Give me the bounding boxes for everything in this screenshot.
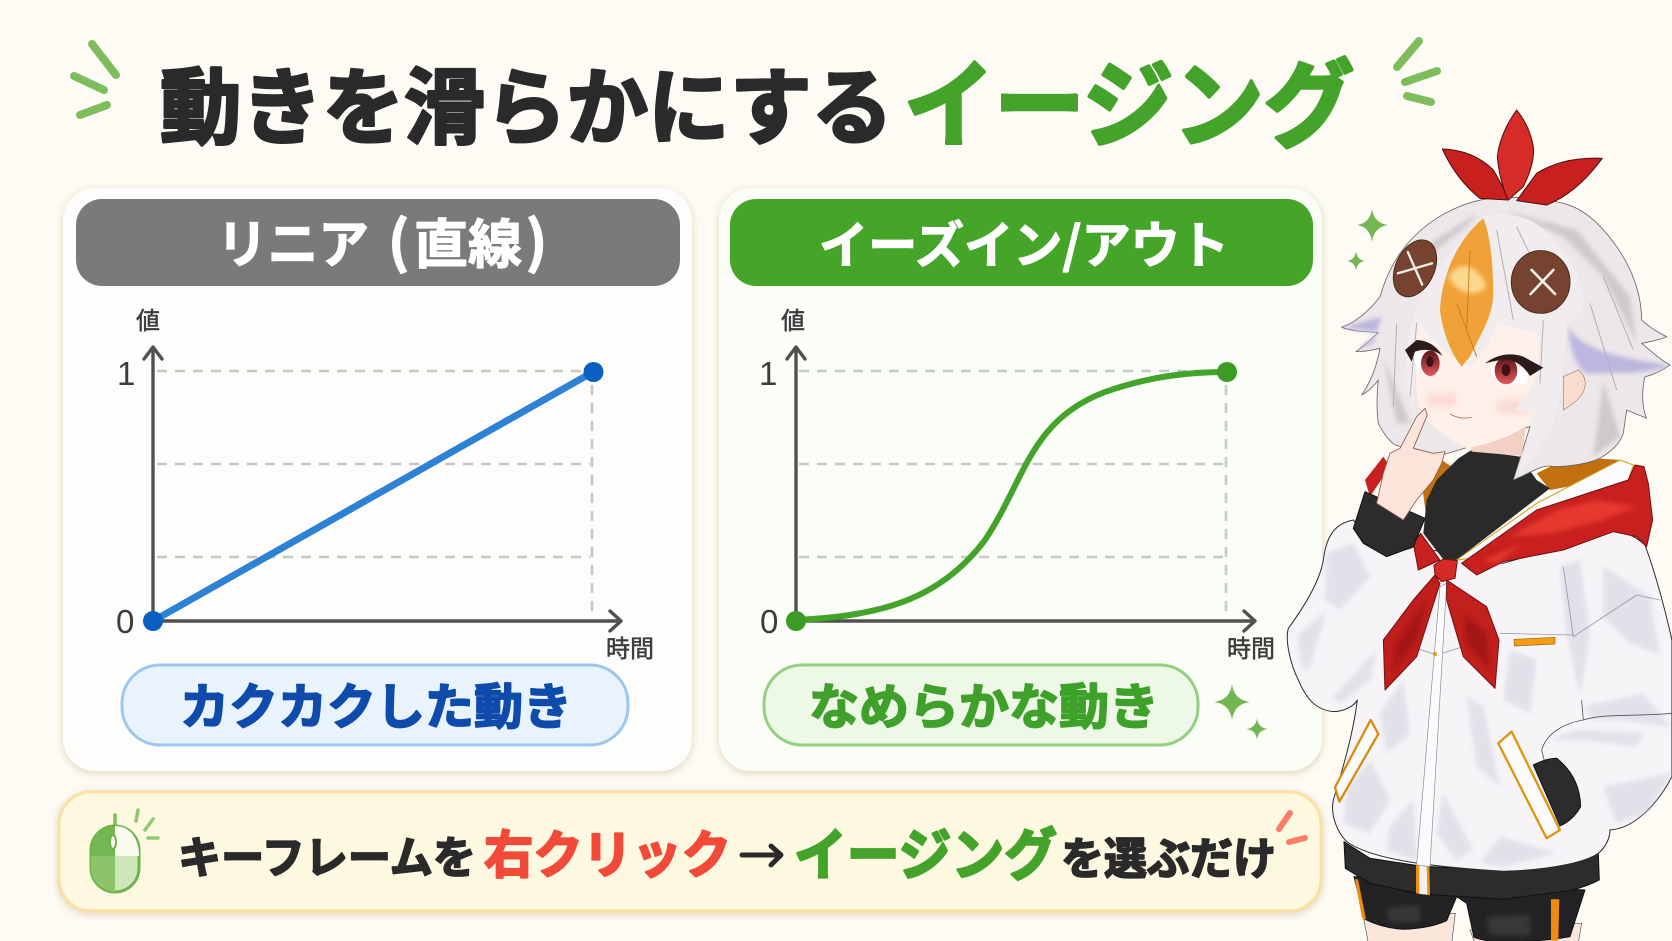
eyes (1405, 340, 1543, 385)
back hair (1342, 197, 1670, 480)
right cuff (1533, 758, 1581, 826)
front hair (1403, 214, 1583, 473)
arrow (742, 846, 781, 865)
face (1415, 323, 1553, 448)
heading: linear: リニア (217, 203, 369, 278)
left button (1385, 233, 1445, 304)
right pocket (1498, 732, 1560, 838)
title: 動きを滑らかにする (160, 41, 893, 161)
icon: mouse (91, 810, 158, 892)
icon: head sparkles (1347, 209, 1388, 271)
chest pocket (1514, 637, 1555, 646)
jacket (1287, 520, 1672, 871)
sleeve outline (1542, 700, 1672, 763)
lavender tips (1342, 317, 1670, 373)
ribbon (1442, 110, 1602, 205)
character illustration (1287, 110, 1672, 941)
callout: jerky motion (122, 665, 628, 745)
hair shading (1383, 210, 1637, 457)
title (160, 30, 1354, 167)
left cuff (1353, 492, 1425, 557)
chart: ease curve graph: 1 (759, 355, 777, 392)
tip text: を選ぶだけ (1061, 823, 1276, 887)
chart: linear graph: 0 (116, 603, 134, 640)
neck (1470, 423, 1527, 456)
chart: ease curve graph: 0 (760, 603, 778, 640)
title: イージング (904, 30, 1354, 167)
icon: sparkles (1214, 684, 1268, 740)
body (1287, 443, 1672, 941)
scarf left strand (1413, 533, 1440, 570)
hand (1377, 408, 1445, 520)
chart: linear graph: 値 (136, 301, 160, 336)
icon: red accent rays (1279, 813, 1305, 842)
shorts (1354, 877, 1585, 941)
icon: right accent rays (1397, 41, 1437, 102)
legs (1363, 913, 1582, 941)
ear (1563, 370, 1585, 410)
blush (1427, 393, 1530, 413)
chart: linear graph (116, 301, 654, 664)
icon: left accent rays (74, 44, 116, 115)
callout: smooth motion: なめらかな動き (809, 668, 1159, 739)
right button (1511, 251, 1570, 313)
panel: tip bar (59, 792, 1321, 911)
heading: ease in out (730, 199, 1313, 286)
zipper (1417, 583, 1447, 867)
chart: ease curve graph (759, 301, 1275, 664)
chart: ease curve graph: 値 (781, 301, 805, 336)
tip text: 右クリック (484, 814, 731, 888)
callout: jerky motion: カクカクした動き (180, 668, 572, 739)
heading: linear: 直線 (414, 203, 522, 279)
jacket shadows (1297, 543, 1672, 867)
left pocket (1335, 720, 1378, 802)
heading: linear (76, 198, 680, 286)
heading: linear: ) (526, 198, 547, 279)
chart: linear graph: 1 (117, 355, 135, 392)
scarf knot (1434, 559, 1457, 582)
scarf tails (1383, 575, 1440, 690)
heading: ease in out: イーズイン/アウト (819, 206, 1229, 278)
heading: linear: ( (388, 198, 409, 279)
turtleneck (1423, 450, 1550, 560)
hood trim (1457, 460, 1633, 560)
jacket hem (1344, 842, 1599, 899)
tip text (178, 811, 1276, 892)
hood left edge (1365, 457, 1390, 497)
orange streak (1440, 218, 1493, 367)
jacket seams (1417, 567, 1660, 655)
chart: linear graph: 時間 (606, 629, 654, 664)
mouth (1450, 414, 1472, 418)
chart: ease curve graph: 時間 (1227, 629, 1275, 664)
tip text: キーフレームを (178, 822, 476, 886)
hood scarf (1462, 465, 1653, 575)
head (1342, 110, 1670, 520)
hood lining (1417, 443, 1620, 520)
tip text: イージング (794, 811, 1057, 892)
panel: linear (63, 188, 692, 771)
panel: ease in out (719, 188, 1322, 771)
